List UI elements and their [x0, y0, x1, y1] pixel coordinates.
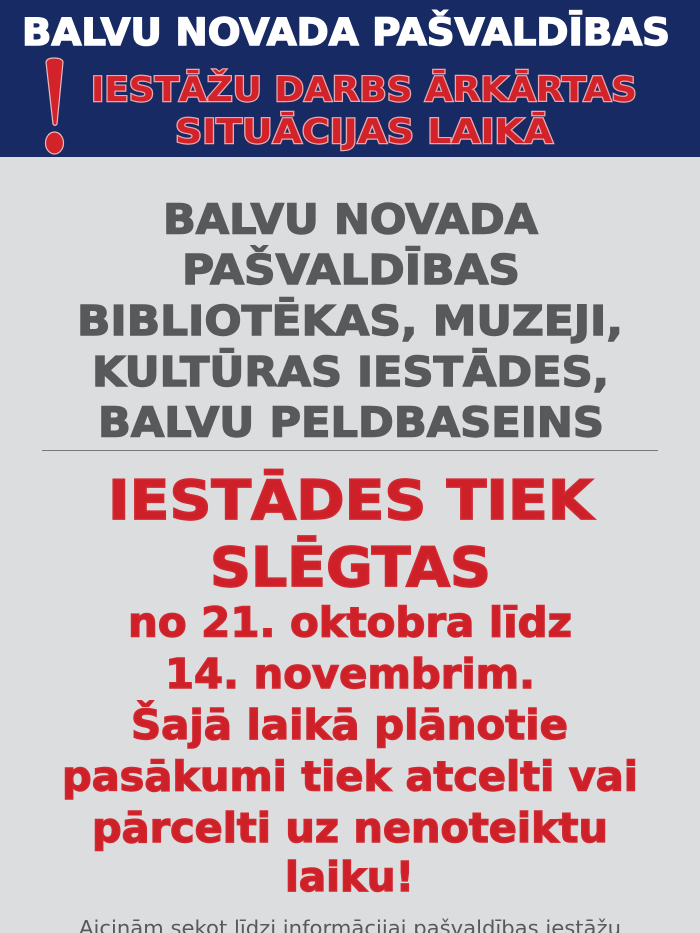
closure details: pasākumi tiek atcelti vai: [62, 752, 638, 800]
heading: institutions list: BALVU NOVADA: [163, 196, 538, 244]
closure details: 14. novembrim.: [165, 650, 535, 698]
closure headline: SLĒGTAS: [210, 536, 491, 599]
header title: BALVU NOVADA PAŠVALDĪBAS: [22, 10, 670, 54]
heading: institutions list: PAŠVALDĪBAS: [182, 246, 520, 294]
closure details: [62, 598, 638, 901]
heading: institutions list: [77, 196, 623, 446]
icon: exclamation mark: [46, 58, 64, 154]
closure headline: [108, 469, 595, 599]
header subtitle: [91, 69, 637, 152]
header subtitle: IESTĀŽU DARBS ĀRKĀRTAS: [91, 69, 637, 110]
closure details: Šajā laikā plānotie: [131, 701, 568, 749]
header banner: [0, 0, 700, 157]
heading: institutions list: KULTŪRAS IESTĀDES,: [92, 348, 609, 396]
header subtitle: SITUĀCIJAS LAIKĀ: [175, 112, 554, 152]
heading: institutions list: BIBLIOTĒKAS, MUZEJI,: [77, 297, 623, 345]
closure headline: IESTĀDES TIEK: [108, 469, 595, 532]
closure details: pārcelti uz nenoteiktu: [92, 804, 608, 852]
heading: institutions list: BALVU PELDBASEINS: [98, 398, 604, 446]
closure details: laiku!: [285, 853, 414, 901]
closure details: no 21. oktobra līdz: [128, 598, 572, 646]
